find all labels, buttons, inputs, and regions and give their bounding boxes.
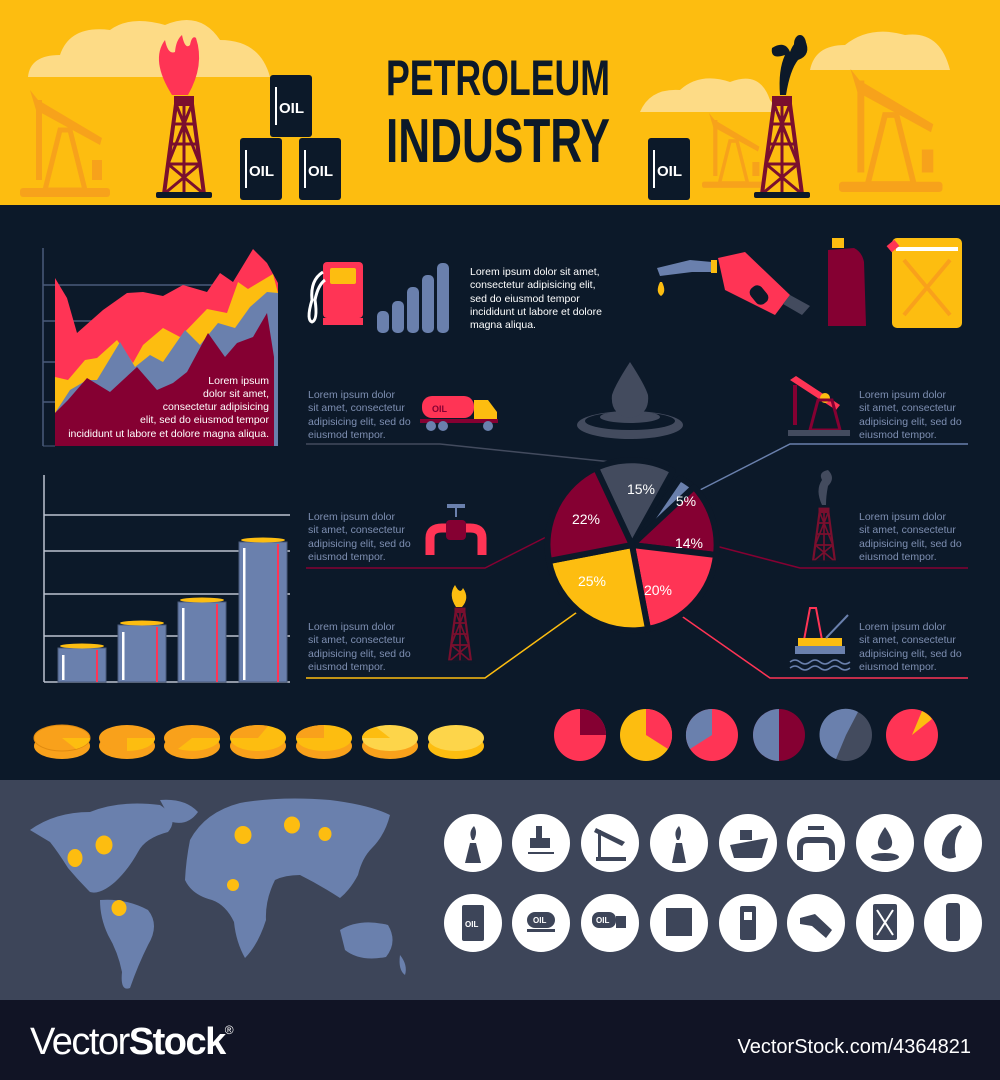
text block top: Lorem ipsum dolor sit amet, — [470, 266, 600, 278]
tank bar chart — [44, 475, 290, 682]
area chart text: consectetur adipisicing — [163, 401, 269, 413]
area chart — [43, 248, 278, 446]
pumpjacks — [20, 90, 110, 197]
pie chart: 5% — [676, 493, 696, 509]
callout texts: Lorem ipsum dolor — [308, 621, 395, 633]
callout texts: adipisicing elit, sed do — [859, 648, 962, 660]
derrick with flame — [156, 96, 212, 198]
pie chart: 22% — [572, 511, 600, 527]
icon: oil bottle — [828, 238, 866, 326]
icon grid — [444, 814, 982, 952]
pie chart: 25% — [578, 573, 606, 589]
pie chart — [547, 460, 717, 630]
icon: pumpjack small — [788, 376, 850, 436]
watermark footer: VectorStock.com/4364821 — [738, 1036, 971, 1058]
pie chart: 20% — [644, 582, 672, 598]
callout texts: eiusmod tempor. — [308, 551, 386, 563]
watermark footer: ® — [225, 1023, 234, 1037]
icon grid: OIL — [533, 916, 546, 925]
map markers — [68, 816, 332, 916]
callout texts: sit amet, consectetur — [859, 524, 956, 536]
callout texts: sit amet, consectetur — [308, 524, 405, 536]
icon: fuel nozzle — [657, 252, 810, 315]
text block top: sed do eiusmod tempor — [470, 293, 580, 305]
text block top: consectetur adipisicing elit, — [470, 279, 595, 291]
text block top: incididunt ut labore et dolore — [470, 306, 602, 318]
pie chart: 14% — [675, 535, 703, 551]
barrels — [270, 75, 312, 137]
area chart text: dolor sit amet, — [203, 388, 269, 400]
callout texts — [308, 389, 962, 673]
callout texts: eiusmod tempor. — [859, 551, 937, 563]
icon grid: OIL — [596, 916, 609, 925]
callout texts: Lorem ipsum dolor — [308, 511, 395, 523]
callout texts: adipisicing elit, sed do — [859, 538, 962, 550]
watermark footer — [0, 1000, 1000, 1080]
callout texts: eiusmod tempor. — [308, 429, 386, 441]
callout texts: adipisicing elit, sed do — [308, 538, 411, 550]
area chart text: Lorem ipsum — [208, 375, 269, 387]
icon: pipe valve — [430, 504, 482, 555]
callout texts: eiusmod tempor. — [859, 661, 937, 673]
watermark footer: VectorStock — [30, 1021, 225, 1063]
text block top: magna aliqua. — [470, 319, 536, 331]
title — [386, 50, 610, 176]
callout texts: sit amet, consectetur — [308, 402, 405, 414]
pie chart: 15% — [627, 481, 655, 497]
header band — [0, 0, 1000, 205]
gray map panel — [0, 780, 1000, 1000]
icon: offshore platform — [790, 608, 850, 670]
callout texts: eiusmod tempor. — [859, 429, 937, 441]
callout texts: adipisicing elit, sed do — [308, 648, 411, 660]
connector lines — [306, 444, 968, 678]
title: PETROLEUM — [386, 50, 610, 106]
area chart text: incididunt ut labore et dolore magna aliqua. — [68, 428, 269, 440]
callout texts: adipisicing elit, sed do — [308, 416, 411, 428]
callout texts: Lorem ipsum dolor — [859, 389, 946, 401]
callout texts: Lorem ipsum dolor — [859, 621, 946, 633]
icon: jerrycan — [887, 238, 962, 328]
callout texts: sit amet, consectetur — [859, 402, 956, 414]
callout texts: Lorem ipsum dolor — [859, 511, 946, 523]
callout texts: adipisicing elit, sed do — [859, 416, 962, 428]
icon: cylinder bars — [377, 263, 449, 333]
icon: derrick with gusher — [809, 470, 839, 564]
area chart text: elit, sed do eiusmod tempor — [140, 414, 270, 426]
callout texts: eiusmod tempor. — [308, 661, 386, 673]
callout texts: Lorem ipsum dolor — [308, 389, 395, 401]
derrick with gusher — [754, 96, 810, 198]
world map — [30, 799, 406, 989]
icon: oil truck: OIL — [432, 404, 448, 414]
title: INDUSTRY — [386, 107, 610, 176]
callout texts: sit amet, consectetur — [859, 634, 956, 646]
3D pies row — [34, 725, 484, 759]
icon: oil drop — [577, 362, 683, 439]
icon: gas pump — [309, 262, 363, 325]
icon: oil truck — [420, 396, 498, 431]
callout texts: sit amet, consectetur — [308, 634, 405, 646]
small flat pies row — [554, 709, 938, 761]
icon: derrick with flame — [445, 585, 475, 664]
icon grid: OIL — [465, 920, 478, 929]
